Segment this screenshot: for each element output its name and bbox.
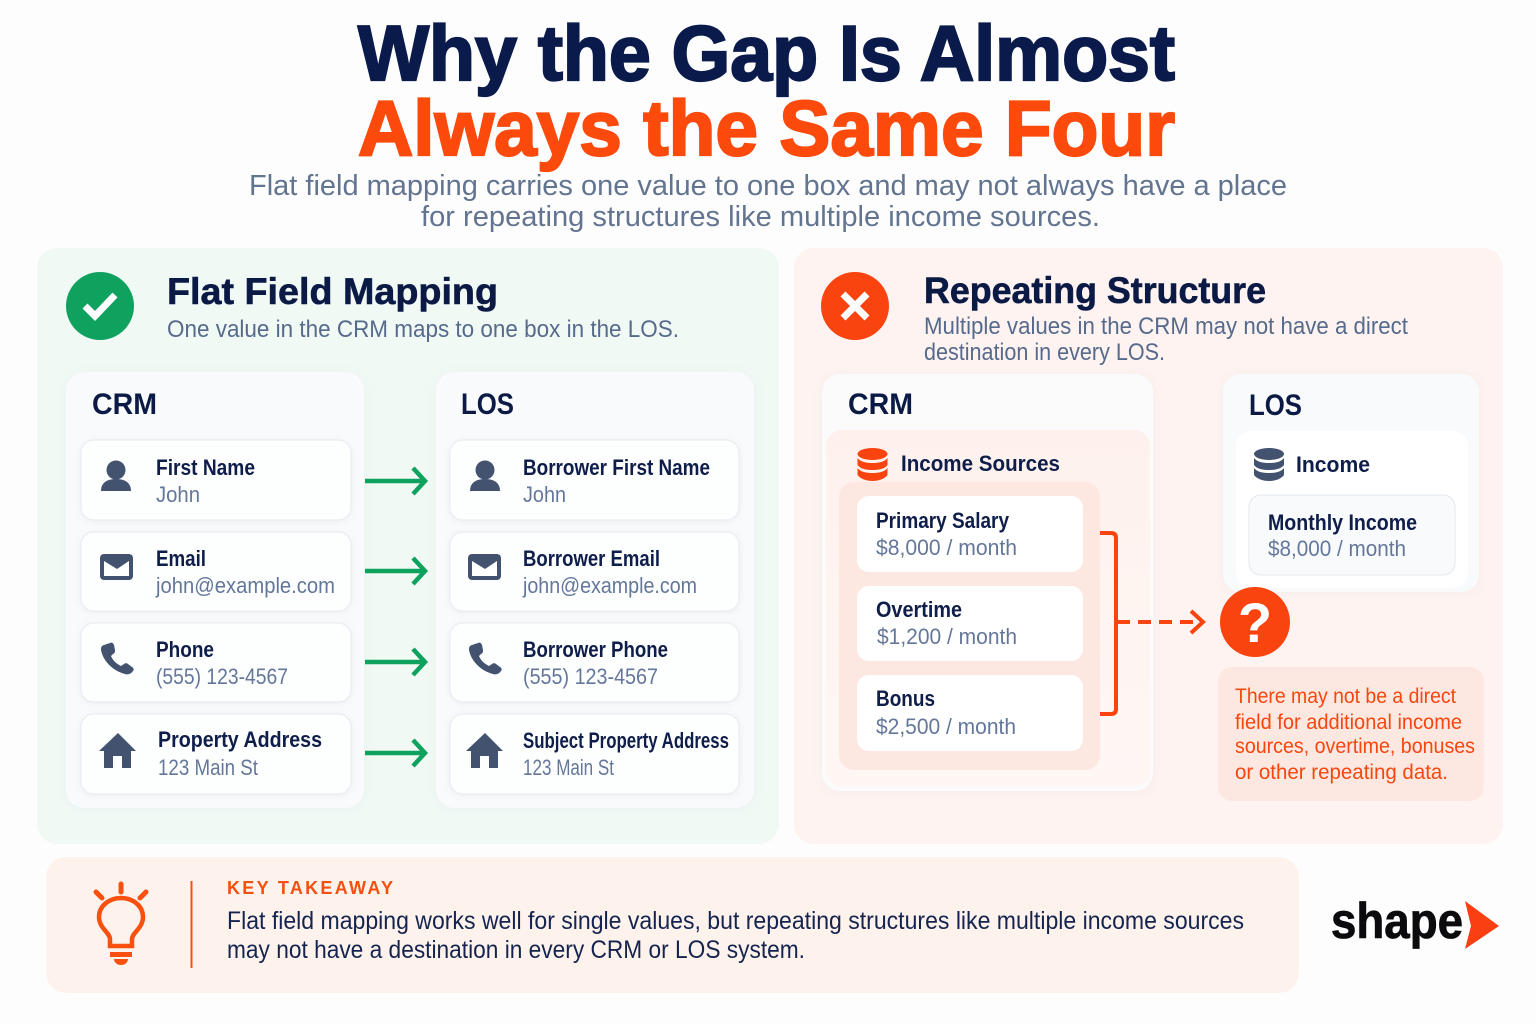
item: bonus: $2,500 / month <box>876 714 1016 739</box>
field: property address: Property Address <box>158 727 322 752</box>
icon: question mark: ? <box>1238 591 1272 654</box>
takeaway label: KEY TAKEAWAY <box>227 878 393 898</box>
panel: flat field mapping <box>37 248 779 844</box>
field: first name: John <box>156 482 200 507</box>
item: primary salary <box>857 496 1083 572</box>
card: LOS: LOS <box>461 388 514 421</box>
icon: database <box>1254 448 1284 481</box>
logo: shape: shape <box>1331 893 1463 949</box>
item: bonus <box>857 675 1083 751</box>
field: borrower first name <box>450 440 739 520</box>
repeating structure description: Multiple values in the CRM may not have a direct <box>924 313 1408 340</box>
arrow: first name <box>365 468 425 494</box>
field: subject property address <box>450 714 739 794</box>
title: Why the Gap Is Almost <box>358 9 1175 97</box>
item: bonus: Bonus <box>876 686 935 711</box>
panel: key takeaway <box>46 857 1299 993</box>
field: borrower first name: Borrower First Name <box>523 455 710 480</box>
item: overtime: $1,200 / month <box>877 624 1017 649</box>
field: borrower email <box>450 532 739 611</box>
callout <box>1218 667 1484 801</box>
icon: green check <box>66 272 134 340</box>
field: borrower phone <box>450 623 739 702</box>
card: CRM income: Income Sources <box>901 451 1060 476</box>
callout: There may not be a direct <box>1235 685 1456 708</box>
arrow: email <box>365 558 425 584</box>
field: email: john@example.com <box>155 573 335 598</box>
field: phone <box>81 623 351 702</box>
card: LOS income <box>1223 374 1479 592</box>
field: borrower phone: (555) 123-4567 <box>523 664 658 689</box>
subtitle <box>249 170 1287 233</box>
callout: sources, overtime, bonuses <box>1235 735 1475 758</box>
dashed arrow <box>1117 611 1203 633</box>
takeaway text: may not have a destination in every CRM or LOS system. <box>227 936 805 964</box>
card: CRM income <box>822 374 1153 791</box>
card: LOS income: Income <box>1296 452 1370 477</box>
flat field description: One value in the CRM maps to one box in the LOS. <box>167 316 679 343</box>
divider <box>190 881 192 968</box>
card: LOS income: LOS <box>1249 389 1302 422</box>
field: phone: Phone <box>156 637 214 662</box>
arrow: address <box>365 740 425 766</box>
field: subject property address: Subject Property Address <box>523 728 729 753</box>
field: borrower first name: John <box>523 482 566 507</box>
takeaway text: Flat field mapping works well for single values, but repeating structures like multiple income sources <box>227 907 1244 935</box>
field: property address <box>81 714 351 794</box>
item: monthly income: Monthly Income <box>1268 510 1417 535</box>
card: CRM <box>66 372 364 808</box>
field: property address: 123 Main St <box>158 755 258 780</box>
field: subject property address: 123 Main St <box>523 755 614 780</box>
panel: repeating structure <box>794 248 1503 844</box>
item: monthly income <box>1249 495 1455 575</box>
title <box>358 9 1175 172</box>
field: email: Email <box>156 546 206 571</box>
field: borrower email: Borrower Email <box>523 546 660 571</box>
icon: question mark <box>1220 587 1290 657</box>
item: primary salary: $8,000 / month <box>876 535 1017 560</box>
arrow: phone <box>365 649 425 675</box>
item: primary salary: Primary Salary <box>876 508 1010 533</box>
heading: repeating structure: Repeating Structure <box>924 270 1266 311</box>
bracket <box>1100 533 1116 714</box>
subtitle: for repeating structures like multiple income sources. <box>421 201 1100 233</box>
takeaway text <box>227 907 1244 964</box>
card: LOS <box>436 372 754 808</box>
field: phone: (555) 123-4567 <box>156 664 288 689</box>
card: CRM: CRM <box>92 388 157 421</box>
item: overtime <box>857 586 1083 661</box>
field: borrower email: john@example.com <box>522 573 697 598</box>
field: email <box>81 532 351 611</box>
repeating structure description: destination in every LOS. <box>924 339 1165 366</box>
field: first name: First Name <box>156 455 255 480</box>
item: monthly income: $8,000 / month <box>1268 536 1406 561</box>
callout: field for additional income <box>1235 711 1462 734</box>
subtitle: Flat field mapping carries one value to one box and may not always have a place <box>249 170 1287 202</box>
heading: flat field mapping: Flat Field Mapping <box>167 271 498 312</box>
item: overtime: Overtime <box>876 597 962 622</box>
card: CRM income: CRM <box>848 388 913 421</box>
callout: or other repeating data. <box>1235 761 1448 784</box>
icon: red x <box>821 272 889 340</box>
icon: light bulb <box>96 884 146 965</box>
field: first name <box>81 440 351 520</box>
icon: orange database <box>858 448 888 481</box>
title: Always the Same Four <box>358 84 1175 172</box>
field: borrower phone: Borrower Phone <box>523 637 668 662</box>
repeating structure description <box>924 313 1408 366</box>
